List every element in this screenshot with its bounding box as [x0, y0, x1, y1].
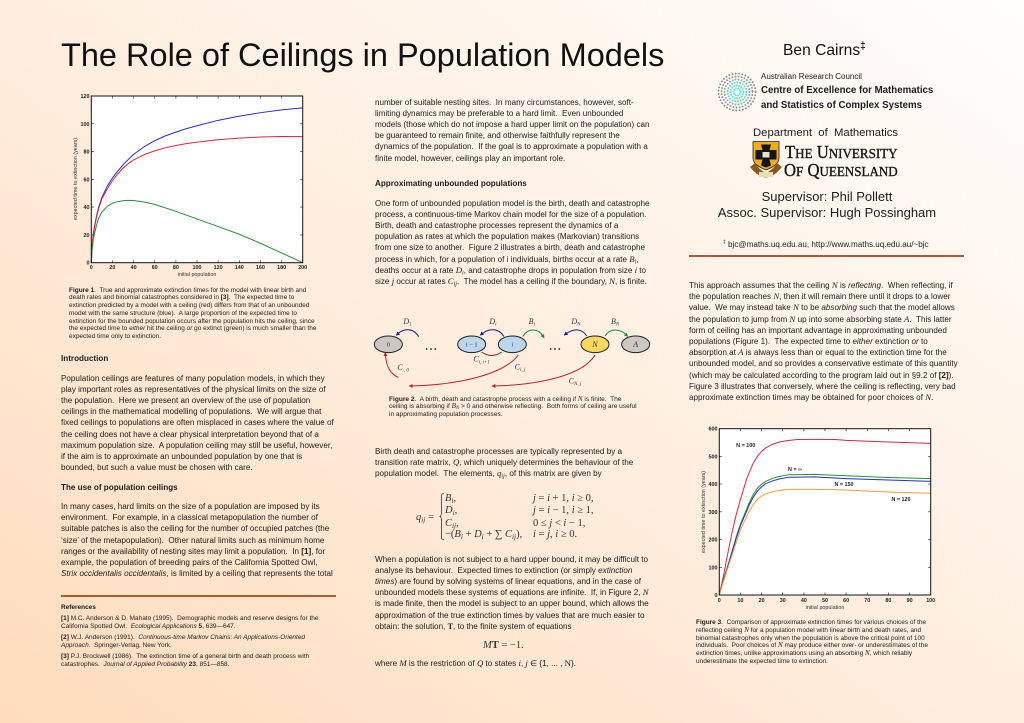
text block: use of ceilings: environment. For example, in a classical metapopulation the number of [61, 513, 318, 522]
state i [498, 336, 526, 353]
reference 1 [61, 615, 318, 630]
left-hand side: qij = [416, 512, 434, 524]
references heading: References [61, 604, 96, 611]
reference 3: [3] P.J. Brockwell (1986). The extinction time of a general birth and death process with [61, 653, 309, 660]
rate labels: D [571, 317, 577, 326]
green curve: ceiling or extinction [91, 200, 303, 263]
figure 1 caption: expected time only to extinction. [69, 333, 161, 340]
x axis tick labels: 140 [235, 265, 244, 271]
arrows: catastrophes [385, 352, 595, 386]
text block: reflecting and absorbing: unbounded model, and so provides a conservative estimate of this quantity [689, 359, 958, 368]
y axis tick labels: 0 [714, 593, 718, 599]
supervisors: Supervisor: Phil Pollett [762, 188, 892, 204]
text block: introduction: fixed ceilings to populations are often misplaced in cases where the value of [61, 418, 334, 427]
supervisors [718, 188, 936, 220]
blue curve: unbounded model [91, 108, 303, 263]
x axis title: initial population [178, 272, 216, 278]
text block: continued nesting sites paragraph: dynamics of the population. If the goal is to approximate a population with a [375, 142, 648, 151]
y axis tick labels: 120 [80, 94, 90, 100]
figure 3 caption: binomial catastrophes only when the population is above the critical point of 100 [696, 635, 925, 642]
x axis tick labels: 30 [780, 598, 786, 604]
text block: use of ceilings: Strix occidentalis occidentalis, is limited by a ceiling that represents the total [61, 569, 333, 578]
text block: reflecting and absorbing: populations (Figure 1). The expected time to either extinction or to [689, 337, 928, 346]
text block: hard upper bound: is made finite, then the model is subject to an upper bound, which allows the [375, 599, 649, 608]
text block: birth death catastrophe: process in which, for a population of i individuals, births occur at a rate Bi, [375, 254, 639, 265]
x axis tick labels: 80 [173, 265, 179, 271]
university wordmark [784, 142, 898, 180]
x axis tick labels: 180 [277, 265, 286, 271]
icon: centre of excellence dotted logo [718, 72, 756, 112]
divider: header [689, 254, 964, 256]
ellipses [426, 348, 560, 350]
equation: MT = -1: MT = −1. [483, 640, 524, 651]
x axis tick labels: 160 [256, 265, 265, 271]
text block: reflecting and absorbing: (which may be calculated according to the program laid out in §9.2 of [2]). [689, 371, 954, 380]
x axis tick labels: 100 [192, 265, 202, 271]
reference 2: [2] W.J. Anderson (1991). Continuous-time Markov Chains: An Applications-Oriented [61, 634, 305, 641]
x axis tick labels: 50 [822, 598, 828, 604]
text block: transition rate matrix: transition rate matrix, Q, which uniquely determines the behaviour of the [375, 457, 633, 467]
state labels: i [511, 342, 513, 349]
text block: hard upper bound: approximation of the true extinction times by values that are much easier to [375, 611, 645, 620]
rate labels: i, i+1 [479, 360, 490, 365]
text block: birth death catastrophe [375, 198, 650, 287]
rate labels: 1 [409, 323, 412, 328]
case 3: Cij, [445, 518, 459, 529]
case 4: −(Bi + Di + ∑ Cij), [445, 529, 522, 541]
text block: use of ceilings: example, the population of breeding pairs of the California Spotted Owl, [61, 558, 318, 567]
figure 2 caption: in approximating population processes. [389, 411, 503, 418]
case 1: Bi, [445, 493, 456, 505]
case 2 condition: j = i − 1, i ≥ 1, [533, 505, 594, 516]
text block: use of ceilings: suitable patches is also the ceiling for the number of occupied patches (the [61, 524, 329, 533]
x axis tick labels: 10 [737, 598, 743, 604]
text block: birth death catastrophe: population as rates at which the population makes (Markovian) transitions [375, 232, 639, 241]
text block: birth death catastrophe: process, a continuous-time Markov chain model for the size of a population. [375, 210, 646, 219]
heading: approximating unbounded populations: Approximating unbounded populations [375, 178, 527, 188]
text block: use of ceilings: ranges or the availability of nesting sites may limit a population. In [1], for [61, 547, 325, 556]
text block: hard upper bound: unbounded models these systems of equations are infinite. If, in Figure 2, N [375, 587, 649, 597]
text block: reflecting and absorbing: absorption at A is always less than or equal to the extinction time for the [689, 347, 947, 357]
centre name line 1: Centre of Excellence for Mathematics [761, 84, 933, 96]
text block: continued nesting sites paragraph: number of suitable nesting sites. In many circumstances, however, soft- [375, 98, 634, 106]
department: Department of Mathematics [753, 127, 898, 139]
blue curve: N = 150 [719, 477, 931, 595]
rate labels: i, j [520, 368, 526, 373]
x axis tick labels: 20 [759, 598, 765, 604]
case 2: Di, [445, 505, 457, 517]
figure 1 caption: extinction for the bounded population occurs after the population hits the ceiling, since [69, 318, 315, 325]
x axis tick labels: 40 [801, 598, 807, 604]
curve labels: N = 100 [736, 443, 755, 449]
text block: reflecting and absorbing: the population reaches N, then it will remain there until it drops to a lower [689, 291, 950, 301]
rate labels: D [403, 317, 409, 326]
state 0 [374, 336, 402, 353]
x axis tick labels: 0 [718, 598, 721, 604]
text block: restriction of Q: where M is the restriction of Q to states i, j ∈ {1, ... , N}. [375, 658, 576, 668]
arrows: births [523, 330, 627, 337]
rate labels: C [515, 362, 520, 371]
of queensland: OF QUEENSLAND [784, 160, 898, 180]
figure 3 caption: underestimate the expected time to extinction. [696, 658, 828, 665]
title: The Role of Ceilings in Population Models [61, 37, 664, 73]
text block: hard upper bound [375, 554, 649, 631]
text block: transition rate matrix [375, 447, 633, 480]
text block: reflecting and absorbing: the population to jump from N up into some absorbing state A. This latter [689, 314, 952, 324]
figure 1 caption [69, 286, 316, 340]
y axis tick labels [80, 94, 90, 267]
supervisors: Assoc. Supervisor: Hugh Possingham [718, 204, 936, 220]
state N [581, 336, 609, 353]
text block: introduction [61, 374, 334, 472]
state labels: i − 1 [466, 342, 477, 349]
text block: continued nesting sites paragraph: models (those which do not impose a hard upper limit on the population) can [375, 120, 650, 129]
state labels: N [591, 340, 598, 349]
y axis title: expected time to extinction (years) [701, 471, 707, 553]
x axis tick labels: 60 [152, 265, 158, 271]
australian research council: Australian Research Council [761, 72, 862, 81]
text block: use of ceilings: ‘size’ of the metapopulation). Other natural limits such as minimum home [61, 536, 324, 545]
text block: birth death catastrophe: deaths occur at a rate Di, and catastrophe drops in population from size i to [375, 265, 646, 276]
x axis tick labels [90, 265, 307, 271]
case 3 condition: 0 ≤ j < i − 1, [533, 518, 585, 528]
orange curve: N = 120 [719, 489, 931, 595]
figure 1: line chart of extinction times [73, 94, 307, 278]
reference 1: California Spotted Owl. Ecological Applications 5, 639—647. [61, 623, 236, 630]
text block: continued nesting sites paragraph: limiting dynamics may be preferable to a hard limit. Even unbounded [375, 109, 623, 118]
contact details: ‡ bjc@maths.uq.edu.au, http://www.maths.uq.edu.au/~bjc [723, 239, 929, 248]
x axis tick labels: 90 [907, 598, 913, 604]
figure 2: state transition diagram [374, 317, 650, 388]
reference 3: catastrophes. Journal of Applied Probability 23, 851—858. [61, 661, 229, 668]
text block: reflecting and absorbing: form of ceiling has an important advantage in approximating unbounded [689, 326, 947, 335]
state i-1 [458, 336, 486, 353]
y axis tick labels: 500 [708, 454, 718, 460]
reference 3 [61, 653, 309, 668]
y axis tick labels [708, 427, 718, 599]
text block: transition rate matrix: population model. The elements, qij, of this matrix are given by [375, 468, 602, 480]
x axis title: initial population [806, 605, 844, 611]
figure 3 caption: Figure 3. Comparison of approximate extinction times for various choices of the [696, 619, 926, 626]
y axis tick labels: 0 [86, 261, 90, 267]
curve labels: N = 150 [834, 482, 854, 488]
icon: university crest [750, 141, 782, 178]
text block: centre of excellence [761, 72, 933, 110]
rate labels: N [576, 323, 581, 328]
text block: introduction: Population ceilings are features of many population models, in which they [61, 374, 325, 382]
rate labels: C [397, 363, 403, 372]
y axis tick labels: 600 [708, 427, 718, 433]
text block: introduction: maximum population size. A population ceiling may still be useful, however, [61, 441, 332, 450]
curve labels [736, 443, 911, 503]
figure 1 caption: model with the same structure (blue). A large proportion of the expected time to [69, 310, 297, 317]
y axis tick labels: 60 [84, 177, 90, 183]
text block: introduction: play important roles as representatives of the physical limits on the size of [61, 385, 326, 394]
x axis tick labels [718, 598, 935, 604]
state labels: A [632, 340, 638, 349]
x axis tick labels: 0 [90, 265, 93, 271]
text block: continued nesting sites paragraph: be guaranteed to remain finite, and otherwise faithfully represent the [375, 131, 620, 140]
centre name line 2: and Statistics of Complex Systems [761, 100, 922, 110]
text block: reflecting and absorbing [689, 280, 958, 402]
y axis tick labels: 400 [708, 482, 718, 488]
figure 3 caption: individuals. Poor choices of N may produce either over- or underestimates of the [696, 641, 928, 649]
text block: hard upper bound: When a population is not subject to a hard upper bound, it may be difficult to [375, 554, 648, 564]
text block: reflecting and absorbing: value. We may instead take N to be absorbing such that the model allows [689, 302, 955, 312]
red curve: model with ceiling [91, 136, 303, 263]
rate labels: C [473, 355, 479, 364]
reference 2 [60, 634, 306, 649]
x axis tick labels: 120 [214, 265, 223, 271]
y axis tick labels: 20 [84, 233, 90, 239]
text block: introduction: the population. Here we present an overview of the use of population [61, 396, 310, 405]
state labels [387, 340, 638, 349]
the university: THE UNIVERSITY [785, 142, 898, 162]
y axis title: expected time to extinction (years) [73, 138, 79, 220]
brace [440, 493, 444, 540]
rate labels: N, j [573, 382, 582, 387]
state labels: 0 [387, 342, 390, 349]
figure 2 caption: ceiling is absorbing if BN > 0 and otherwise reflecting. Both forms of ceiling are useful [389, 402, 637, 412]
state A [622, 336, 650, 353]
figure 1 caption: extinction predicted by a model with a ceiling (red) differs from that of an unbounded [69, 302, 309, 309]
figure 3 caption: extinction times, unlike approximations using an absorbing N, which reliably [696, 649, 912, 657]
red curve: N = 100 [719, 439, 931, 595]
arrows: deaths [397, 330, 587, 337]
rate labels: B [529, 317, 534, 326]
x axis tick labels: 60 [843, 598, 849, 604]
text block: birth death catastrophe: One form of unbounded population model is the birth, death and catastrophe [375, 198, 650, 208]
text block: introduction: if the aim is to approximate an unbounded population by one that is [61, 452, 302, 461]
curve labels: N = ∞ [788, 467, 802, 473]
x axis tick labels: 100 [926, 598, 935, 604]
curve labels: N = 120 [891, 497, 911, 503]
divider: references [61, 595, 336, 597]
text block: transition rate matrix: Birth death and catastrophe processes are typically represented by a [375, 447, 622, 456]
text block: reflecting and absorbing: approximate extinction times may be obtained for poor choices of N. [689, 392, 933, 402]
rate labels [397, 317, 620, 387]
case 1 condition: j = i + 1, i ≥ 0, [533, 493, 594, 504]
equation: matrix elements [416, 493, 594, 541]
rate labels: B [611, 317, 616, 326]
heading: the use of population ceilings: The use of population ceilings [61, 482, 178, 492]
heading: introduction: Introduction [61, 354, 108, 362]
rate labels: ·, 0 [403, 369, 409, 374]
rate labels: i [534, 323, 536, 328]
figure 2 caption [389, 394, 637, 418]
reference 2: Approach. Springer-Verlag, New York. [61, 642, 172, 649]
text block: continued nesting sites paragraph: finite model, however, ceilings play an important role. [375, 154, 565, 163]
x axis tick labels: 80 [885, 598, 891, 604]
figure 1 caption: Figure 1. True and approximate extinction times for the model with linear birth and [69, 286, 306, 294]
rate labels: i [495, 323, 497, 328]
text block: continued nesting sites paragraph [375, 98, 650, 163]
case 4 condition: i = j, i ≥ 0. [533, 529, 577, 540]
y axis tick labels: 80 [84, 150, 90, 156]
text block: reflecting and absorbing: Figure 3 illustrates that conversely, where the ceiling is reflecting, very bad [689, 382, 956, 391]
figure 1 caption: death rates and binomial catastrophes considered in [3]. The expected time to [69, 294, 294, 301]
text block: birth death catastrophe: from one size to another. Figure 2 illustrates a birth, death and catastrophe [375, 243, 645, 252]
text block: hard upper bound: analyse its behaviour. Expected times to extinction (or simply extinction [375, 566, 632, 575]
reference 1: [1] M.C. Anderson & D. Mahato (1995). Demographic models and reserve designs for the [61, 615, 318, 622]
y axis tick labels: 100 [80, 122, 90, 128]
text block: use of ceilings [61, 502, 333, 578]
y axis tick labels: 200 [708, 538, 718, 544]
y axis tick labels: 100 [708, 565, 718, 571]
figure 3: line chart of extinction times by ceiling [701, 426, 935, 611]
rate labels: C [569, 376, 574, 385]
text block: hard upper bound: obtain: the solution, T, to the finite system of equations [375, 622, 572, 631]
figure 3 caption: reflecting ceiling N for a population model with linear birth and death rates, and [696, 626, 921, 634]
figure 1 caption: the expected time to either hit the ceiling or go extinct (green) is much smaller than the [69, 325, 316, 332]
y axis tick labels: 300 [708, 510, 718, 516]
x axis tick labels: 40 [131, 265, 137, 271]
text block: reflecting and absorbing: This approach assumes that the ceiling N is reflecting. When reflecting, if [689, 280, 953, 290]
x axis tick labels: 200 [298, 265, 307, 271]
text block: use of ceilings: In many cases, hard limits on the size of a population are imposed by its [61, 502, 320, 511]
figure 2 caption: Figure 2. A birth, death and catastrophe process with a ceiling if N is finite. The [389, 394, 621, 402]
y axis tick labels: 40 [84, 205, 90, 211]
text block: birth death catastrophe: size j occur at rates Cij. The model has a ceiling if the boundary, N, is finite. [375, 276, 647, 287]
rate labels: N [615, 323, 620, 328]
rate labels: D [489, 317, 495, 326]
text block: introduction: bounded, but such a value must be chosen with care. [61, 463, 253, 472]
x axis tick labels: 20 [109, 265, 115, 271]
author name: Ben Cairns‡ [783, 41, 866, 59]
text block: hard upper bound: times) are found by solving systems of linear equations, and in the case of [375, 577, 641, 586]
figure 3 caption [696, 619, 928, 665]
x axis tick labels: 70 [864, 598, 870, 604]
green curve: N = infinity [719, 474, 931, 595]
text block: introduction: ceilings in the mathematical modelling of populations. We will argue that [61, 407, 321, 416]
references [60, 604, 318, 668]
text block: birth death catastrophe: Birth, death and catastrophe processes represent the dynamics of a [375, 221, 618, 230]
text block: introduction: the ceiling does not have a clear physical interpretation beyond that of a [61, 430, 319, 439]
